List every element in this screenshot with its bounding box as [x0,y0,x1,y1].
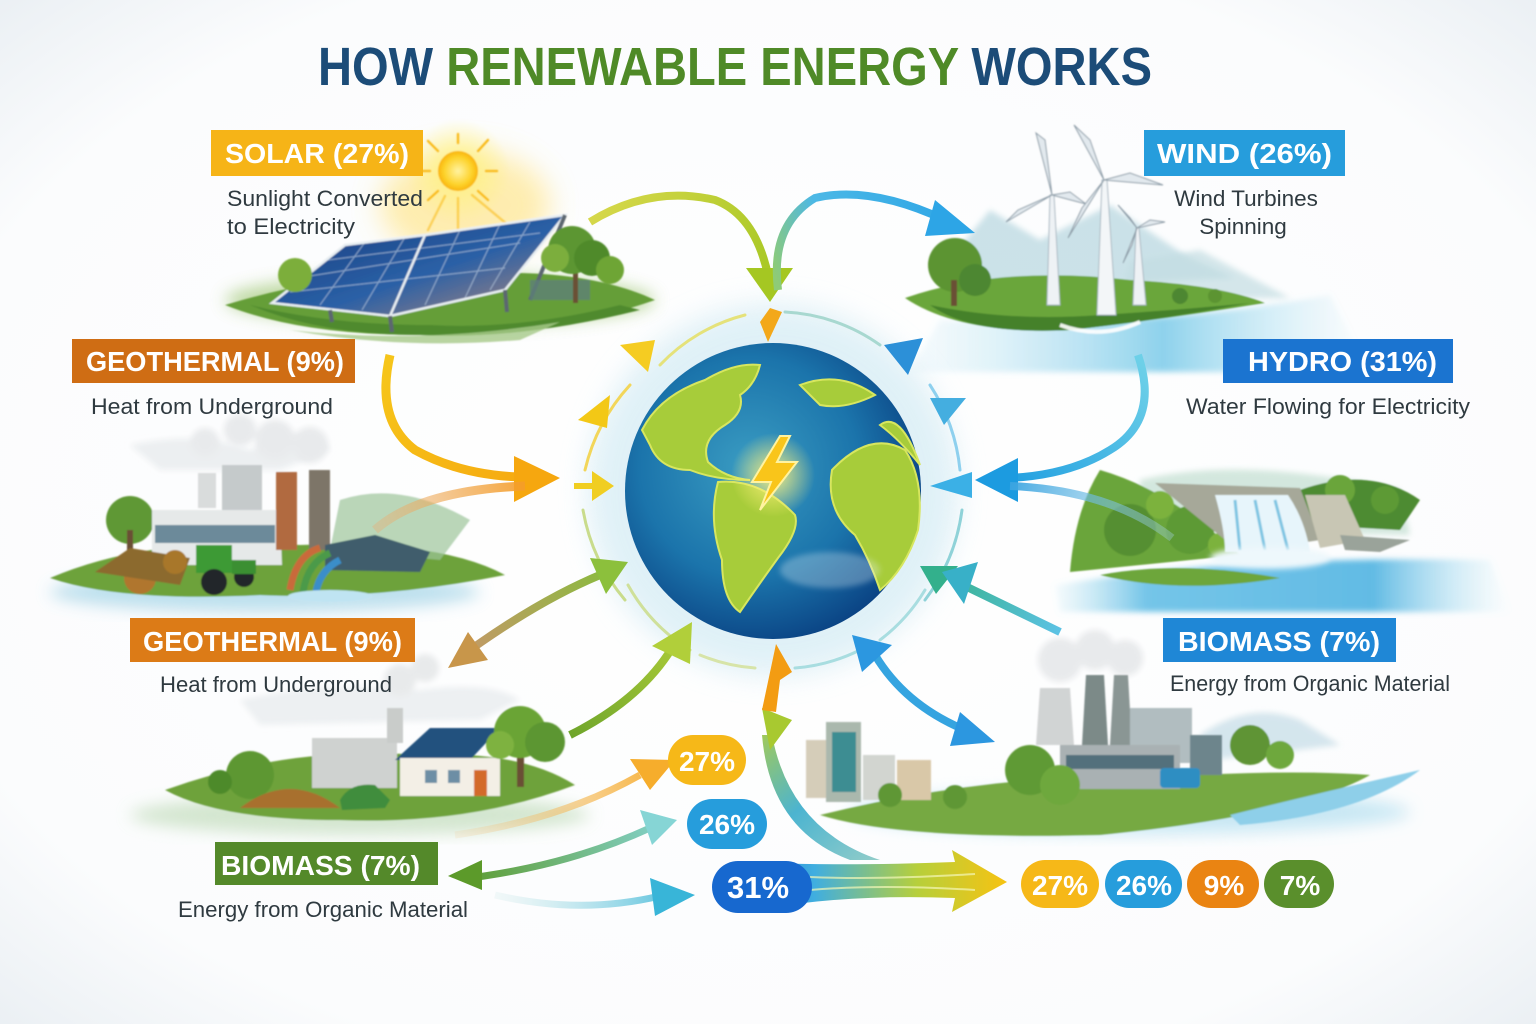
arrow: solar down to geothermal flow [386,355,560,502]
arrow: globe to city plant [852,635,995,746]
badge: row 7%: 7% [1280,870,1320,901]
badge: row 26%: 26% [1116,870,1172,901]
arrow: dam to globe [1010,486,1172,538]
label: solar [211,130,423,239]
globe [588,305,958,675]
label: biomass right: BIOMASS (7%) [1178,626,1380,657]
geothermal buildings [152,465,430,602]
hydro dam wall [1155,483,1365,552]
badge: row 9%: 9% [1204,870,1244,901]
label: wind [1144,130,1345,239]
arrow: hydro to globe [975,355,1145,502]
scene: biomass plant and city [806,630,1420,836]
arrow: to 27% [455,759,675,835]
label: geothermal top: GEOTHERMAL (9%) [86,346,344,377]
icon: lightning bolt [752,436,797,510]
arrow: biomass to 26% [448,810,677,890]
badge: 27% [668,735,746,785]
continents [642,365,920,612]
badge: 26% [687,799,767,849]
badge: 26%: 26% [699,809,755,840]
label: geothermal top [72,339,355,419]
title: HOW RENEWABLE ENERGY WORKS [318,37,1152,97]
label: solar: SOLAR (27%) [225,138,409,169]
label: biomass left: Energy from Organic Material [178,897,468,922]
solar panels [272,215,590,332]
badge: 27%: 27% [679,746,735,777]
label: geothermal lower: Heat from Underground [160,672,392,697]
badge: row 27% [1021,860,1099,908]
badge: row 26% [1105,860,1182,908]
scene: biomass village [130,654,590,835]
label: hydro: Water Flowing for Electricity [1186,394,1471,419]
city buildings [806,722,931,802]
scene: solar farm [225,119,655,343]
trees [278,226,624,303]
label: hydro [1186,339,1471,419]
arrow: biomass plant to globe [942,562,1060,632]
scene: hydro dam [1055,470,1510,612]
label: wind: Spinning [1199,214,1287,239]
arrow: plant to globe [375,486,525,530]
scene: wind farm [905,125,1370,372]
icon: wind turbines [1006,125,1165,315]
farm buildings [312,708,500,796]
label: biomass right [1163,618,1450,696]
badge: row 9% [1187,860,1259,908]
ring of arrows around globe [574,308,972,668]
arrow: globe to wind [777,194,975,290]
badge: 31% [712,861,812,913]
badge arrow: 31% to row [770,850,1007,912]
label: geothermal top: Heat from Underground [91,394,333,419]
label: geothermal lower [130,618,415,697]
icon: sun [406,119,510,232]
arrow: bottom flow upward [762,644,880,860]
label: geothermal lower: GEOTHERMAL (9%) [143,626,402,657]
label: solar: to Electricity [227,214,356,239]
scene: geothermal plant [50,414,505,612]
arrow: solar to globe [590,196,793,302]
label: biomass left: BIOMASS (7%) [221,850,420,881]
arrow: to 31% [495,878,695,916]
label: wind: Wind Turbines [1174,186,1318,211]
arrow: biomass to globe [570,622,692,735]
small ring arrowheads [574,308,972,594]
label: solar: Sunlight Converted [227,186,423,211]
badge: row 7% [1264,860,1334,908]
label: biomass right: Energy from Organic Material [1170,671,1450,696]
plant [1036,675,1222,789]
label: hydro: HYDRO (31%) [1248,346,1437,377]
smoke [191,414,328,463]
badge: row 27%: 27% [1032,870,1088,901]
biomass bales and tractor [95,545,256,595]
label: wind: WIND (26%) [1157,138,1332,169]
arrow: geothermal double to globe [448,558,628,668]
badge: 31%: 31% [727,870,789,905]
label: biomass left [178,842,468,922]
